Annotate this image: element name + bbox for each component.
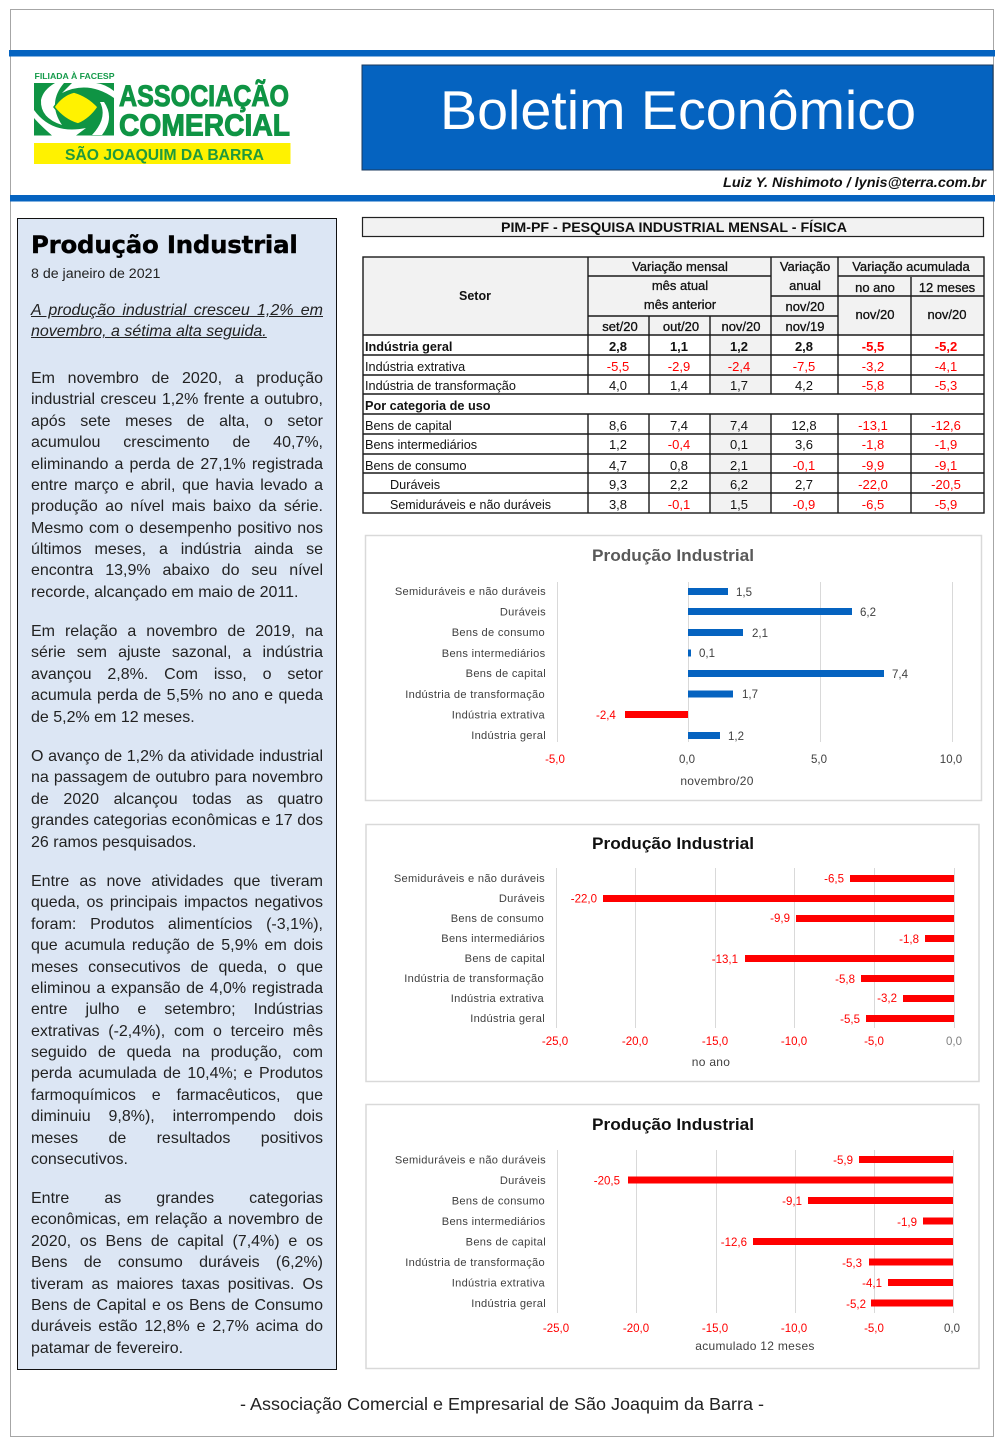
table header labels: anual <box>789 278 821 293</box>
category labels: Indústria de transformação <box>404 973 544 985</box>
category labels: Indústria extrativa <box>452 1278 546 1290</box>
lead paragraph <box>30 302 323 340</box>
article date: 8 de janeiro de 2021 <box>31 266 160 282</box>
value labels: 7,4 <box>892 669 909 681</box>
value labels: -9,1 <box>782 1196 802 1208</box>
paragraph 1 <box>31 370 324 601</box>
table values: -0,9 <box>793 497 815 512</box>
chart 3: acumulado 12 meses: Produção Industrial <box>592 1116 754 1134</box>
value labels: -5,5 <box>840 1014 860 1026</box>
table header labels: 12 meses <box>919 280 976 295</box>
table values: -0,1 <box>793 458 815 473</box>
paragraph 4: foram: Produtos alimentícios (-3,1%), <box>31 916 323 933</box>
table values: -5,2 <box>935 339 957 354</box>
table values: 1,1 <box>670 339 688 354</box>
table values: 6,2 <box>730 477 748 492</box>
table header labels: Variação acumulada <box>852 259 971 274</box>
paragraph 4: seguido de queda na produção, com <box>31 1044 323 1061</box>
table values: -2,4 <box>728 359 750 374</box>
paragraph 4: farmoquímicos e farmacêuticos, que <box>31 1087 323 1104</box>
value labels: -12,6 <box>721 1237 747 1249</box>
value labels: -5,9 <box>833 1155 853 1167</box>
table title: PIM-PF <box>362 218 984 236</box>
axis labels: -20,0 <box>623 1323 649 1335</box>
table row labels: Bens de consumo <box>365 459 467 473</box>
paragraph 2: de 5,2% em 12 meses. <box>31 708 195 726</box>
paragraph 3: O avanço de 1,2% da atividade industrial <box>31 748 323 765</box>
table values: -5,9 <box>935 497 957 512</box>
axis labels: -25,0 <box>543 1323 569 1335</box>
table values: 3,8 <box>609 497 627 512</box>
axis labels: 0,0 <box>944 1323 960 1335</box>
value labels: -9,9 <box>770 913 790 925</box>
table header labels: out/20 <box>663 319 699 334</box>
table values: -5,5 <box>607 359 629 374</box>
paragraph 3 <box>31 748 323 850</box>
chart 1: novembro/20: Produção Industrial <box>592 547 754 565</box>
category labels: Indústria extrativa <box>452 710 546 722</box>
table header labels: set/20 <box>602 319 638 334</box>
paragraph 5: 2020, os Bens de capital (7,4%) e os <box>31 1233 323 1250</box>
value labels: -5,8 <box>835 974 855 986</box>
value labels: -20,5 <box>594 1176 620 1188</box>
table values <box>607 339 961 512</box>
paragraph 1: Em novembro de 2020, a produção <box>31 370 323 387</box>
axis labels: -5,0 <box>864 1323 884 1335</box>
paragraph 4: extrativas (-2,4%), com o terceiro mês <box>31 1023 323 1040</box>
value labels: -5,3 <box>842 1258 862 1270</box>
chart 3: acumulado 12 meses <box>366 1104 979 1368</box>
axis labels: acumulado 12 meses <box>695 1339 815 1353</box>
table values: -1,8 <box>862 437 884 452</box>
paragraph 5: Bens de Capital e os Bens de Consumo <box>31 1297 323 1314</box>
paragraph 4: meses de resultados positivos <box>31 1130 323 1146</box>
category labels: Bens de capital <box>465 953 545 965</box>
category labels: Semiduráveis e não duráveis <box>394 873 545 885</box>
table values: 1,4 <box>670 378 688 393</box>
value labels: -1,8 <box>899 934 919 946</box>
axis labels: -15,0 <box>702 1323 728 1335</box>
table values: -7,5 <box>793 359 815 374</box>
paragraph 5 <box>31 1190 323 1357</box>
table values: 4,2 <box>795 378 813 393</box>
category labels: Bens de consumo <box>452 627 545 639</box>
paragraph 1: recorde, alcançado em maio de 2011. <box>31 584 298 601</box>
category labels: Bens intermediários <box>441 933 545 945</box>
paragraph 2: acumula perda de 5,5% no ano e queda <box>31 687 323 704</box>
bars <box>625 588 884 739</box>
bars <box>603 875 954 1022</box>
table values: -13,1 <box>858 418 888 433</box>
axis labels: -10,0 <box>781 1323 807 1335</box>
paragraph 1: últimos meses, a indústria ainda se <box>31 541 323 558</box>
paragraph 4: perda acumulada de 10,4%; e Produtos <box>31 1065 323 1082</box>
table values: -5,5 <box>862 339 884 354</box>
axis labels: -10,0 <box>781 1036 807 1048</box>
table values: -5,8 <box>862 378 884 393</box>
logo: Associação Comercial: FILIADA À FACESP <box>34 71 115 81</box>
category labels: Duráveis <box>500 1175 546 1187</box>
table values: -12,6 <box>931 418 961 433</box>
category labels: Semiduráveis e não duráveis <box>395 1154 546 1166</box>
table row labels <box>365 340 551 512</box>
paragraph 4: consecutivos. <box>31 1151 128 1168</box>
table values: -0,1 <box>668 497 690 512</box>
paragraph 4: queda, os principais impactos negativos <box>31 894 323 911</box>
paragraph 1: acumulou crescimento de 40,7%, <box>31 434 323 451</box>
table values: 1,2 <box>609 437 627 452</box>
paragraph 5: patamar de fevereiro. <box>31 1340 183 1357</box>
table values: 4,0 <box>609 378 627 393</box>
table header labels: mês anterior <box>644 297 717 312</box>
value labels: -5,2 <box>846 1299 866 1311</box>
axis labels: 0,0 <box>946 1036 962 1048</box>
logo: Associação Comercial: COMERCIAL <box>119 108 290 142</box>
paragraph 1: industrial cresceu 1,2% frente a outubro, <box>31 391 323 408</box>
author byline: Luiz Y. Nishimoto / lynis@terra.com.br <box>723 174 988 190</box>
table title: PIM-PF: PIM-PF - PESQUISA INDUSTRIAL MENSAL - FÍSICA <box>501 219 847 235</box>
paragraph 5: econômicas, em relação a novembro de <box>31 1211 323 1228</box>
category labels: Bens intermediários <box>442 1216 546 1228</box>
table values: 7,4 <box>670 418 688 433</box>
table values: 12,8 <box>791 418 817 433</box>
table row labels: Por categoria de uso <box>365 399 491 413</box>
table header labels: nov/19 <box>785 319 825 334</box>
category labels: Duráveis <box>500 606 546 618</box>
category labels: Bens intermediários <box>442 648 546 660</box>
category labels: Semiduráveis e não duráveis <box>395 586 546 598</box>
category labels: Indústria geral <box>471 730 546 742</box>
axis labels: -20,0 <box>622 1036 648 1048</box>
table header labels: nov/20 <box>721 319 761 334</box>
table header labels: nov/20 <box>785 299 825 314</box>
paragraph 5: Entre as grandes categorias <box>31 1190 323 1207</box>
category labels: Indústria extrativa <box>451 993 545 1005</box>
category labels: Duráveis <box>499 893 545 905</box>
table row labels: Duráveis <box>390 478 440 492</box>
axis labels: no ano <box>692 1055 730 1069</box>
chart 2: no ano <box>366 824 979 1082</box>
paragraph 1: Mesmo com o desempenho positivo nos <box>31 520 323 537</box>
paragraph 2: Em relação a novembro de 2019, na <box>31 623 323 640</box>
table values: -3,2 <box>862 359 884 374</box>
value labels: -3,2 <box>877 993 897 1005</box>
category labels <box>395 1154 546 1310</box>
table row labels: Indústria de transformação <box>365 379 516 393</box>
category labels: Bens de capital <box>466 668 546 680</box>
paragraph 2: avançou 2,8%. Com isso, o setor <box>31 666 323 683</box>
table values: 2,8 <box>609 339 627 354</box>
table values: 1,2 <box>730 339 748 354</box>
chart 2: no ano: Produção Industrial <box>592 835 754 853</box>
axis labels: 0,0 <box>679 754 695 766</box>
paragraph 1: após sete meses de alta, o setor <box>31 413 323 430</box>
category labels: Bens de consumo <box>452 1196 545 1208</box>
paragraph 4 <box>31 873 324 1168</box>
value labels: 1,7 <box>742 689 758 701</box>
table header labels: nov/20 <box>927 307 967 322</box>
value labels: 1,2 <box>728 731 744 743</box>
paragraph 5: Bens de consumo duráveis (6,2%) <box>31 1254 323 1271</box>
table values: -0,4 <box>668 437 690 452</box>
axis labels <box>545 754 962 788</box>
paragraph 1: entre março e abril, que havia levado a <box>31 477 323 494</box>
footer: - Associação Comercial e Empresarial de São Joaquim da Barra - <box>240 1394 764 1414</box>
table row labels: Indústria extrativa <box>365 360 466 374</box>
paragraph 4: diminuiu 9,8%), interrompendo dois <box>31 1108 323 1125</box>
paragraph 4: eliminou a expansão de 4,0% registrada <box>31 980 323 997</box>
paragraph 3: grandes categorias econômicas e 17 dos <box>31 812 323 829</box>
value labels: -22,0 <box>571 894 597 906</box>
axis labels: -15,0 <box>702 1036 728 1048</box>
paragraph 2 <box>31 623 324 726</box>
paragraph 3: 26 ramos pesquisados. <box>31 834 196 850</box>
paragraph 4: que acumula redução de 5,9% em dois <box>31 937 323 954</box>
header banner: Boletim Econômico <box>362 65 993 170</box>
category labels: Indústria de transformação <box>405 1257 545 1269</box>
paragraph 1: encontra 13,9% abaixo do seu nível <box>31 562 323 579</box>
category labels: Indústria de transformação <box>405 689 545 701</box>
table row labels: Indústria geral <box>365 340 452 354</box>
article heading: Produção Industrial <box>31 230 298 259</box>
table values: 1,5 <box>730 497 748 512</box>
value labels: -13,1 <box>712 954 738 966</box>
table values: -9,9 <box>862 458 884 473</box>
axis labels <box>543 1323 960 1353</box>
paragraph 5: tiveram as maiores taxas positivas. Os <box>31 1276 323 1292</box>
axis labels <box>542 1036 962 1069</box>
axis labels: -25,0 <box>542 1036 568 1048</box>
table values: 1,7 <box>730 378 748 393</box>
paragraph 4: entre julho e setembro; Indústrias <box>31 1001 323 1018</box>
lead paragraph: novembro, a sétima alta seguida. <box>31 323 267 340</box>
data table <box>363 257 984 513</box>
table values: -5,3 <box>935 378 957 393</box>
table values: -1,9 <box>935 437 957 452</box>
value labels <box>594 1155 917 1311</box>
table values: 0,1 <box>730 437 748 452</box>
table values: 8,6 <box>609 418 627 433</box>
table header labels: mês atual <box>652 278 708 293</box>
category labels <box>394 873 545 1025</box>
lead paragraph: A produção industrial cresceu 1,2% em <box>31 302 323 319</box>
table header labels: Variação <box>780 259 830 274</box>
header banner: Boletim Econômico: Boletim Econômico <box>440 79 916 141</box>
paragraph 4: Entre as nove atividades que tiveram <box>31 873 323 890</box>
category labels <box>395 586 546 742</box>
table header labels: Setor <box>459 289 491 303</box>
logo: Associação Comercial <box>34 71 290 164</box>
table header labels <box>459 259 976 334</box>
table values: -2,9 <box>668 359 690 374</box>
table values: 4,7 <box>609 458 627 473</box>
axis labels: -5,0 <box>545 754 565 766</box>
bars <box>628 1156 953 1306</box>
value labels <box>596 587 909 743</box>
category labels: Indústria geral <box>470 1013 545 1025</box>
paragraph 4: meses consecutivos de queda, o que <box>31 958 323 976</box>
paragraph 1: eliminando a perda de 27,1% registrada <box>31 456 323 472</box>
table values: -6,5 <box>862 497 884 512</box>
value labels: -1,9 <box>897 1217 917 1229</box>
table values: 0,8 <box>670 458 688 473</box>
value labels <box>571 874 919 1026</box>
table values: 9,3 <box>609 477 627 492</box>
paragraph 3: de 2020 alcançou todas as quatro <box>31 791 323 808</box>
table header labels: Variação mensal <box>632 259 728 274</box>
table row labels: Bens de capital <box>365 419 452 433</box>
table values: 2,2 <box>670 477 688 492</box>
logo: Associação Comercial: ASSOCIAÇÃO <box>119 79 289 113</box>
table row labels: Bens intermediários <box>365 438 477 452</box>
logo: Associação Comercial: SÃO JOAQUIM DA BARRA <box>65 144 264 164</box>
table header labels: nov/20 <box>855 307 895 322</box>
value labels: -6,5 <box>824 874 844 886</box>
panel: article text <box>17 218 337 1370</box>
value labels: 6,2 <box>860 607 876 619</box>
table values: 2,7 <box>795 477 813 492</box>
axis labels: 5,0 <box>811 754 827 766</box>
category labels: Indústria geral <box>471 1298 546 1310</box>
table values: -22,0 <box>858 477 888 492</box>
table values: 7,4 <box>730 418 748 433</box>
value labels: 1,5 <box>736 587 752 599</box>
axis labels: 10,0 <box>940 754 962 766</box>
table values: 2,1 <box>730 458 748 473</box>
table values: 3,6 <box>795 437 813 452</box>
paragraph 1: produção ao nível mais baixo da série. <box>31 498 323 515</box>
paragraph 2: série sem ajuste sazonal, a indústria <box>31 644 323 661</box>
axis labels: novembro/20 <box>680 774 754 788</box>
value labels: 2,1 <box>752 628 768 640</box>
axis labels: -5,0 <box>864 1036 884 1048</box>
paragraph 3: na passagem de outubro para novembro <box>31 769 323 786</box>
table row labels: Semiduráveis e não duráveis <box>390 498 551 512</box>
table values: -4,1 <box>935 359 957 374</box>
value labels: -2,4 <box>596 710 616 722</box>
table values: -20,5 <box>931 477 961 492</box>
value labels: 0,1 <box>699 648 715 660</box>
value labels: -4,1 <box>862 1278 882 1290</box>
category labels: Bens de capital <box>466 1236 546 1248</box>
paragraph 5: duráveis estão 12,8% e 2,7% acima do <box>31 1318 323 1335</box>
table values: 2,8 <box>795 339 813 354</box>
table values: -9,1 <box>935 458 957 473</box>
table header labels: no ano <box>855 280 895 295</box>
chart 1: novembro/20 <box>366 536 982 800</box>
category labels: Bens de consumo <box>451 913 544 925</box>
